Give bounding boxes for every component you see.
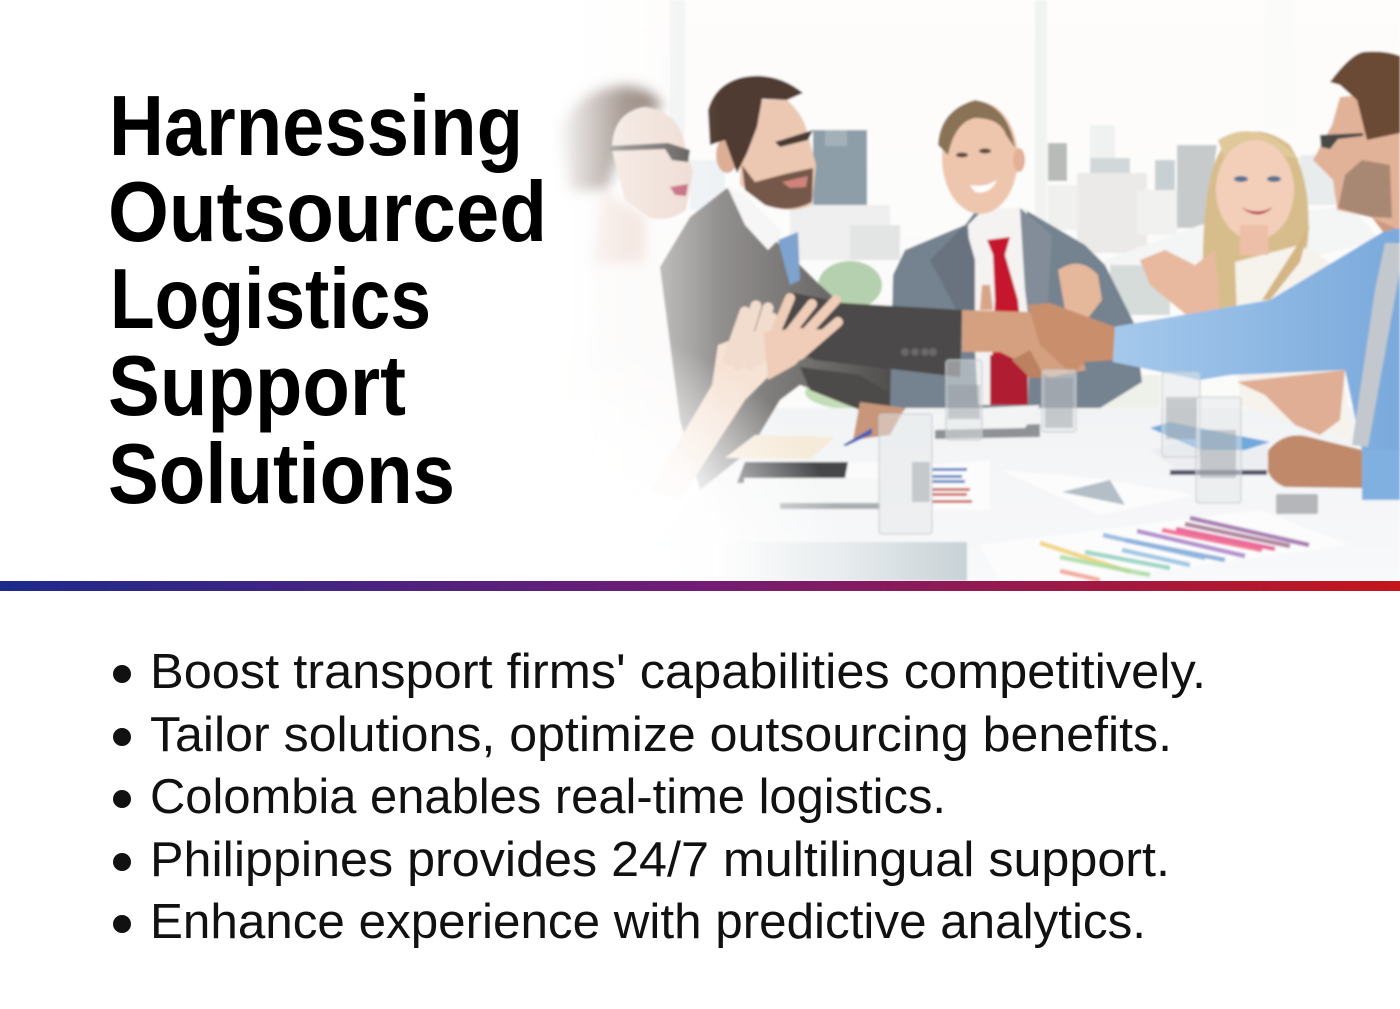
- bullet 2: Tailor solutions, optimize outsourcing benefits.: [150, 708, 1172, 762]
- title: [108, 79, 547, 522]
- left and lower-left white fade over photo: [520, 0, 860, 581]
- gradient divider bar: [0, 581, 1400, 591]
- bullet 1: Boost transport firms' capabilities competitively.: [150, 645, 1206, 699]
- laptop edge: [713, 542, 967, 581]
- person: blonde woman clapping: [1140, 131, 1352, 440]
- title: Harnessing: [109, 79, 523, 174]
- table: [620, 408, 1400, 580]
- bullet 5: Enhance experience with predictive analytics.: [150, 895, 1146, 949]
- greenery: [805, 261, 915, 410]
- person: woman at far left: [560, 86, 712, 520]
- dark jacket sleeve reaching to handshake: [770, 292, 962, 377]
- drinking glasses: [879, 360, 1241, 534]
- clapping hands of woman at left: [650, 298, 838, 500]
- white left panel behind title: [0, 0, 535, 581]
- city skyline: [690, 125, 1380, 315]
- bullet list: [113, 645, 1206, 949]
- table items: notebooks, tablets, papers: [725, 405, 1318, 515]
- person: man in blue shirt with glasses: [1113, 52, 1400, 500]
- title: Support: [108, 339, 406, 434]
- window background: [540, 0, 1400, 420]
- hero photo: business handshake at meeting table: [0, 0, 1400, 581]
- printed bar chart on table: [980, 510, 1350, 581]
- hand holding pen on table: [843, 402, 905, 446]
- title: Outsourced: [108, 165, 547, 260]
- person: smiling man with red tie: [890, 100, 1142, 408]
- bullet 3: Colombia enables real-time logistics.: [150, 770, 946, 824]
- handshake: [901, 303, 1115, 405]
- bullet 4: Philippines provides 24/7 multilingual support.: [150, 833, 1170, 887]
- person: bearded man in dark suit: [660, 76, 908, 490]
- title: Solutions: [108, 427, 455, 522]
- window frames: [670, 0, 1295, 225]
- title: Logistics: [110, 252, 431, 347]
